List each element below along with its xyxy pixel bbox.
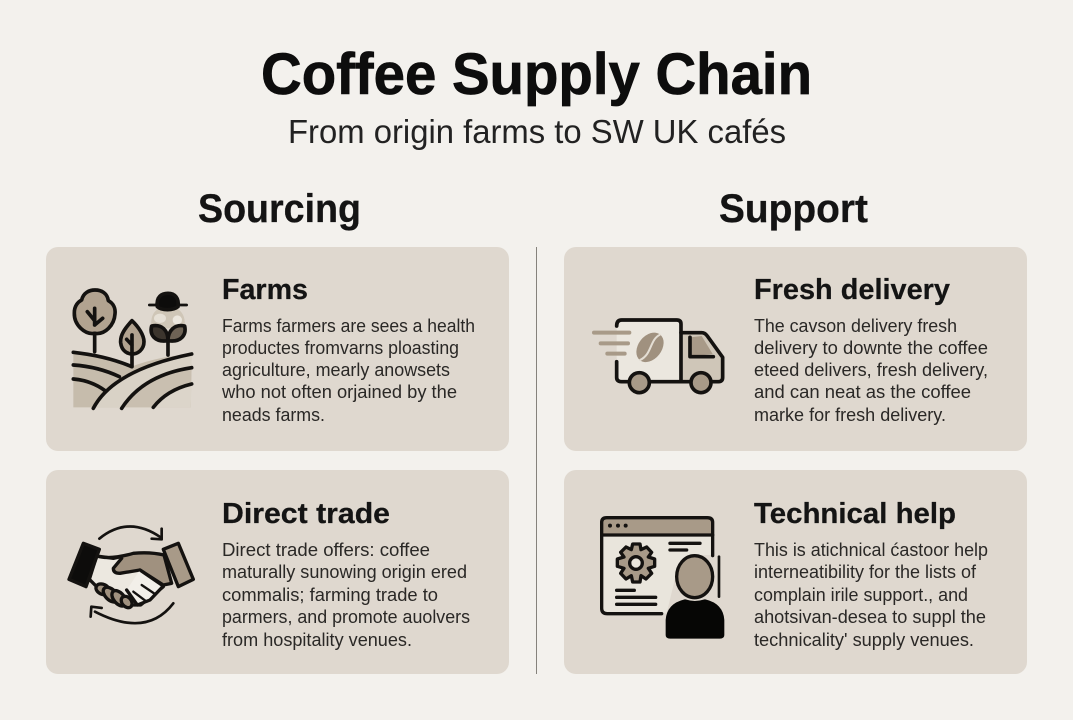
text block: Direct trade: maturally sunowing origin ered xyxy=(222,561,467,582)
panel: Direct trade xyxy=(46,470,509,674)
icon: browser window with gear and support person xyxy=(602,518,723,637)
text block: Farms: who not often orjained by the xyxy=(221,381,457,402)
panel: Technical help xyxy=(564,470,1027,674)
text block: Direct trade: from hospitality venues. xyxy=(222,629,412,650)
panel: Farms xyxy=(46,247,509,451)
text block: Direct trade: parmers, and promote auolvers xyxy=(222,606,470,627)
text block: Technical help: complain irile support., and xyxy=(754,584,968,605)
icon: farm with trees and farmer xyxy=(73,290,192,408)
text block: Farms xyxy=(221,315,475,425)
icon: handshake with cycle arrows xyxy=(69,526,193,623)
text block: Technical help: This is atichnical ćastoor help xyxy=(754,539,988,560)
text block: Technical help: interneatibility for the lists of xyxy=(754,561,977,582)
text block: Technical help xyxy=(754,539,988,650)
heading: Sourcing: Sourcing xyxy=(198,187,361,231)
panel: Fresh delivery xyxy=(564,247,1027,451)
heading: Support: Support xyxy=(719,187,868,231)
heading: Direct trade: Direct trade xyxy=(222,498,390,530)
heading: Technical help: Technical help xyxy=(754,498,956,530)
text block: Direct trade xyxy=(222,539,470,650)
icon: delivery truck with coffee bean xyxy=(594,320,723,393)
text block: Fresh delivery: eteed delivers, fresh delivery, xyxy=(754,359,988,380)
text block: Fresh delivery: and can neat as the coffee xyxy=(754,381,971,402)
text block: Direct trade: Direct trade offers: coffee xyxy=(222,539,430,560)
text block: Fresh delivery: The cavson delivery fresh xyxy=(754,315,957,336)
heading: Fresh delivery: Fresh delivery xyxy=(754,274,950,306)
text block: Technical help: technicality' supply venues. xyxy=(754,629,974,650)
text block: Fresh delivery: delivery to downte the coffee xyxy=(754,337,988,358)
text block: Farms: agriculture, mearly anowsets xyxy=(222,359,450,380)
text block: Fresh delivery: marke for fresh delivery. xyxy=(754,404,946,425)
text block: Farms: Farms farmers are sees a health xyxy=(222,315,475,336)
text block: Technical help: ahotsivan-desea to suppl the xyxy=(754,606,986,627)
title: Coffee Supply Chain xyxy=(261,42,812,107)
subtitle: From origin farms to SW UK cafés xyxy=(288,113,786,150)
text block: Farms: productes fromvarns ploasting xyxy=(222,337,459,358)
text block: Fresh delivery xyxy=(754,315,988,425)
text block: Farms: neads farms. xyxy=(222,404,325,425)
heading: Farms: Farms xyxy=(222,274,308,306)
text block: Direct trade: commalis; farming trade to xyxy=(222,584,438,605)
